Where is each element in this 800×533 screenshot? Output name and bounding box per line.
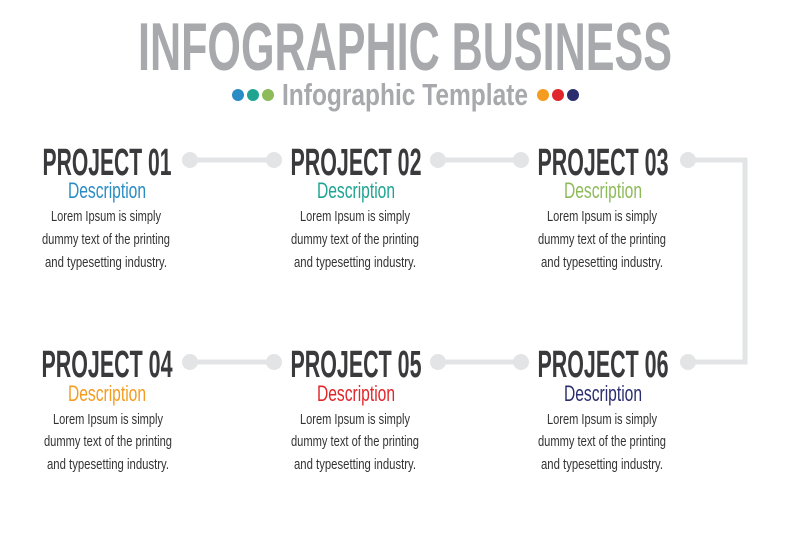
project 03: Description [564, 178, 642, 203]
project 02: and typesetting industry. [294, 254, 416, 271]
project 04: Lorem Ipsum is simply [53, 411, 163, 428]
project 03: PROJECT 03 [538, 142, 668, 184]
project 04: and typesetting industry. [47, 456, 169, 473]
project 04: PROJECT 04 [42, 344, 172, 386]
project 06: and typesetting industry. [541, 456, 663, 473]
project 01: PROJECT 01 [42, 142, 172, 184]
project 03: dummy text of the printing [538, 231, 666, 248]
project 01: and typesetting industry. [45, 254, 167, 271]
project 05: Lorem Ipsum is simply [300, 411, 410, 428]
project 02: dummy text of the printing [291, 231, 419, 248]
project 06 [538, 344, 668, 473]
project 03: and typesetting industry. [541, 254, 663, 271]
project 06: PROJECT 06 [538, 344, 668, 386]
project 03: Lorem Ipsum is simply [547, 208, 657, 225]
project 05: dummy text of the printing [291, 433, 419, 450]
project 06: dummy text of the printing [538, 433, 666, 450]
connector path [182, 152, 745, 370]
subtitle: Infographic Template [282, 77, 528, 112]
project 01: Lorem Ipsum is simply [51, 208, 161, 225]
project 05 [290, 344, 422, 473]
project 03 [538, 142, 668, 271]
project 01: Description [68, 178, 146, 203]
project 02: Description [317, 178, 395, 203]
project 04: dummy text of the printing [44, 433, 172, 450]
project 05: Description [317, 381, 395, 406]
project 04 [42, 344, 172, 473]
project 01 [42, 142, 172, 271]
project 06: Lorem Ipsum is simply [547, 411, 657, 428]
project 05: and typesetting industry. [294, 456, 416, 473]
project 01: dummy text of the printing [42, 231, 170, 248]
project 02: PROJECT 02 [290, 142, 422, 184]
project 05: PROJECT 05 [290, 344, 422, 386]
project 06: Description [564, 381, 642, 406]
project 02: Lorem Ipsum is simply [300, 208, 410, 225]
project 04: Description [68, 381, 146, 406]
project 02 [290, 142, 422, 271]
